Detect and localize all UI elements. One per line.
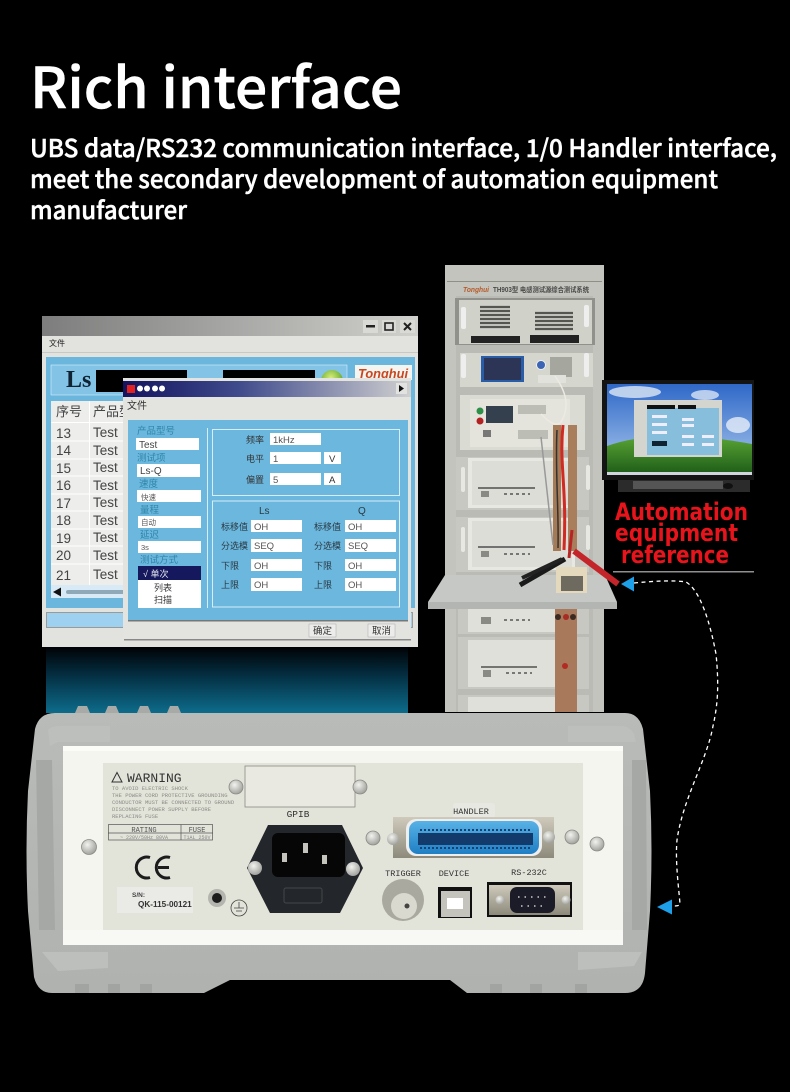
warning label: DISCONNECT POWER SUPPLY BEFORE [112,806,212,813]
subtitle text: UBS data/RS232 communication interface, 1/0 Handler interface, [30,130,777,165]
ground symbol [231,900,247,916]
back panel [103,763,583,930]
recessed cavity [63,746,623,945]
rating table: RATING [131,827,157,835]
limits group: 下限 [221,561,239,571]
copper bars and cables [541,376,577,712]
data table: Test [93,425,118,440]
transformer and clips [520,530,618,593]
dialog blue area [128,420,408,620]
rack unit: power supply 2 [456,517,590,572]
data table: Test [93,495,118,510]
limits group: OH [254,580,268,591]
data table: Test [93,513,118,528]
handler connector [387,803,555,858]
cancel button [368,624,395,637]
blue main panel [46,357,415,608]
limits group: Ls [259,506,270,517]
panel: instrument rear [26,706,652,993]
limits group: OH [348,561,362,572]
frequency group: 偏置 [246,474,264,485]
frequency group: 1 [273,454,278,465]
panel: settings dialog [123,378,411,640]
callout: automation equipment reference [615,498,748,569]
confirm button [309,624,336,637]
limits group: 上限 [314,580,332,590]
data table: Test [93,567,118,582]
power inlet [247,825,363,913]
data table: Test [93,548,118,563]
rack header text [463,285,589,294]
left settings column: 测试方式 [140,554,179,566]
frequency group: 1kHz [273,435,295,446]
frequency group: 频率 [246,434,264,445]
left settings column [136,425,201,608]
left settings column: 自动 [141,517,156,527]
window control buttons [363,320,415,333]
serial number label: QK-115-00121 [138,900,192,909]
warning label: TO AVOID ELECTRIC SHOCK [112,785,189,792]
left settings column: 列表 [154,582,172,593]
handle corner brackets [42,726,642,971]
left settings column: Test [139,440,158,451]
data table: Test [93,478,118,493]
limits group: OH [254,561,268,572]
limits group: 标移值 [314,521,341,532]
left settings column: 量程 [140,505,160,516]
frequency group: V [329,454,336,465]
frequency group: 5 [273,475,278,486]
blank plate [245,766,355,807]
left settings column: √ 单次 [143,568,168,579]
left settings column: 延迟 [140,529,160,541]
arrowhead: upper [621,576,634,592]
left settings column: 产品型号 [137,425,175,437]
left settings column: Ls-Q [140,466,162,477]
left settings column: 速度 [139,478,159,490]
serial number label: S/N: [132,892,145,899]
data table: 20 [56,548,71,563]
dialog menu label: 文件 [127,399,147,412]
warning label: WARNING [127,771,182,786]
panel: software window [42,316,418,647]
data table [51,401,132,585]
limits group: SEQ [254,541,274,552]
data table: 14 [56,443,72,458]
readout header: Ls [66,367,91,393]
dashed connector arrow [621,576,718,914]
data table: 18 [56,513,71,528]
GPIB label: GPIB [287,809,310,820]
warning label: CONDUCTOR MUST BE CONNECTED TO GROUND [112,799,235,806]
status bar [46,612,412,628]
RS-232C port: RS-232C [511,868,547,878]
callout: automation equipment reference: reference [621,541,729,569]
rack unit: lower supplies [458,604,589,712]
data table: 序号 [56,404,82,419]
readout header [51,365,347,395]
data table: Test [93,530,118,545]
shelf [428,575,617,609]
left settings column: 快速 [141,492,156,502]
ground jack [208,889,226,907]
limits group: SEQ [348,541,368,552]
mini software window [634,400,722,457]
left settings column: 测试项 [137,452,166,464]
rack unit: computer [455,298,595,345]
callout: automation equipment reference: Automation [615,498,748,526]
limits group: 上限 [221,580,239,590]
title: Rich interface [30,44,402,125]
warning label [112,771,235,820]
panel: test rack [428,265,618,712]
panel: monitor with keyboard [602,380,754,492]
device USB port: DEVICE [439,869,469,879]
rack unit: tester [460,395,585,450]
data table: 13 [56,426,71,441]
subtitle text: manufacturer [30,192,188,227]
limits group: OH [348,522,362,533]
brand logo: Tonghui [358,366,408,381]
rack unit: power supply 1 [456,457,590,510]
horizontal scrollbar [51,585,126,598]
data table: Test [93,443,118,458]
blue reflection under software window [46,647,408,713]
rating table [108,824,213,841]
rack header text: TH903型 电感测试源综合测试系统 [493,285,589,294]
arrowhead: lower [657,900,672,914]
left settings column: 3s [141,543,149,552]
side handle shading [36,760,647,930]
frequency group [212,430,400,496]
subtitle text [30,130,777,227]
trigger BNC: TRIGGER [385,869,421,879]
limits group: 分选模 [314,540,341,551]
limits group: 标移值 [221,521,248,532]
data table: 21 [56,568,71,583]
rating table: T1AL 250V [183,835,211,841]
cancel button: 取消 [372,625,391,637]
limits group [212,501,400,607]
warning label: THE POWER CORD PROTECTIVE GROUNDING [112,792,228,799]
data table: 19 [56,531,71,546]
rating table: FUSE [189,827,205,835]
limits group: Q [358,506,366,517]
instrument body [26,713,652,993]
data table: Test [93,460,118,475]
data table: 17 [56,496,71,511]
limits group: OH [254,522,268,533]
menu label: 文件 [49,338,65,348]
limits group: OH [348,580,362,591]
limits group: 分选模 [221,540,248,551]
instrument top bumps [75,706,181,713]
screws [82,780,604,854]
rating table: ~ 220V/50Hz 80VA [120,835,168,841]
foot ribs [75,984,587,993]
device USB port [438,869,472,918]
CE mark [136,857,170,878]
warning label: REPLACING FUSE [112,813,159,820]
data table: 16 [56,478,71,493]
rack unit: LCR meter [460,353,593,387]
trigger BNC [382,869,424,921]
data table: 15 [56,461,71,476]
limits group: 下限 [314,561,332,571]
frequency group: A [329,475,336,486]
frequency group: 电平 [246,453,264,464]
confirm button: 确定 [313,625,332,637]
dialog title bar [123,381,411,397]
handler connector: HANDLER [453,807,489,817]
callout: automation equipment reference: equipment [615,519,738,547]
rack header text: Tonghui [463,285,490,294]
data table: 产品型 [93,404,132,419]
subtitle text: meet the secondary development of automation equipment [30,161,718,196]
serial number label [117,887,193,913]
left settings column: 扫描 [154,594,172,605]
RS-232C port [487,868,572,917]
